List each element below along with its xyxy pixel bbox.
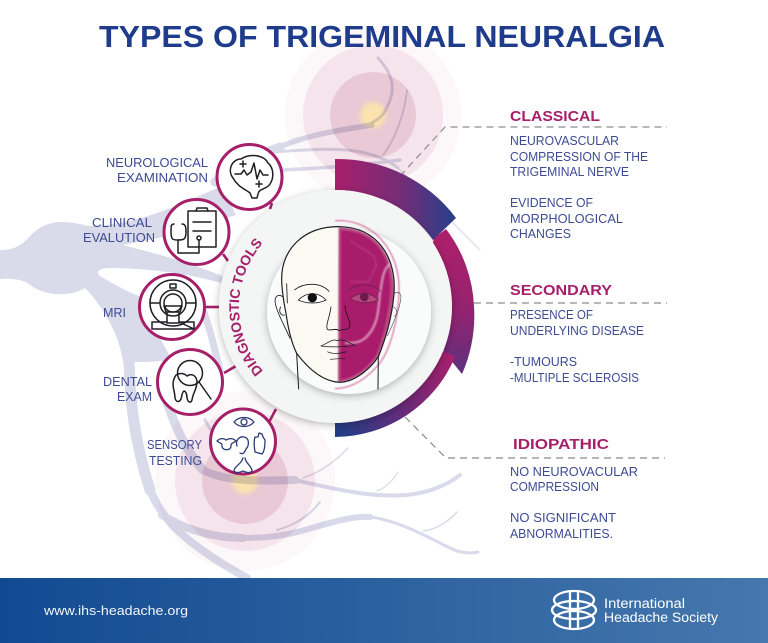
outer white disc <box>219 190 452 423</box>
text block: UNDERLYING DISEASE <box>510 324 644 338</box>
inner white disc <box>267 230 431 394</box>
face: pink halo <box>335 221 399 389</box>
face: neck <box>297 353 378 389</box>
face: magenta pain half <box>341 231 390 379</box>
face: light trigeminal band <box>345 263 391 343</box>
face: inner lighter band <box>350 241 377 282</box>
icon: MRI scanner <box>150 280 196 329</box>
tool: dental exam <box>103 350 222 414</box>
dashed leader: secondary <box>474 302 667 304</box>
label: EXAM <box>117 390 152 404</box>
label: MRI <box>103 306 126 320</box>
icon ring: tooth <box>158 350 222 414</box>
face: right ear <box>387 292 401 336</box>
face: magenta rim <box>338 227 394 382</box>
website url: www.ihs-headache.org <box>43 603 188 618</box>
face: left ear <box>275 283 290 338</box>
arc: classical segment <box>335 159 456 240</box>
glow: upper pain point <box>285 27 461 203</box>
text block: -MULTIPLE SCLEROSIS <box>510 371 639 385</box>
icon: brain with pulse <box>230 156 273 198</box>
arc: secondary segment <box>420 229 474 374</box>
heading: SECONDARY <box>510 282 612 299</box>
heading: IDIOPATHIC <box>513 436 609 453</box>
footer band <box>0 578 768 643</box>
label: DENTAL <box>103 375 152 389</box>
connector stubs <box>206 203 276 424</box>
tool: sensory testing <box>147 409 276 474</box>
tool: neurological examination <box>106 144 282 210</box>
logo name: International <box>604 596 685 611</box>
text block: COMPRESSION OF THE <box>510 150 648 164</box>
icon: clipboard and stethoscope <box>171 208 216 253</box>
tool: MRI <box>103 274 204 340</box>
text block: COMPRESSION <box>510 480 599 494</box>
icon ring: scanner <box>140 274 204 340</box>
face illustration <box>275 221 401 389</box>
tool: clinical evalution <box>83 200 229 264</box>
text block: MORPHOLOGICAL <box>510 212 623 226</box>
text block: NO SIGNIFICANT <box>510 511 616 525</box>
dashed leader: classical <box>400 127 667 176</box>
label: EXAMINATION <box>117 171 208 185</box>
text block: NEUROVASCULAR <box>510 134 619 148</box>
face: head outline <box>282 227 394 382</box>
dashed leader: idiopathic <box>405 417 665 458</box>
label: CLINICAL <box>92 216 152 230</box>
label: NEUROLOGICAL <box>106 156 208 170</box>
text block: TRIGEMINAL NERVE <box>510 165 629 179</box>
icon ring: senses <box>210 409 276 474</box>
curved label: diagnostic tools: DIAGNOSTIC TOOLS <box>229 238 263 377</box>
icon: tooth and magnifier <box>173 360 211 402</box>
logo name: Headache Society <box>604 610 718 625</box>
icon: eye, tongue, ear, hand, nose <box>217 418 265 473</box>
text block: -TUMOURS <box>510 355 577 369</box>
title: TYPES OF TRIGEMINAL NEURALGIA <box>99 19 665 54</box>
glow: lower pain point <box>155 391 335 571</box>
trigeminal nerve illustration <box>0 58 480 578</box>
panel: secondary <box>510 282 644 385</box>
logo mark <box>552 591 596 629</box>
text block: CHANGES <box>510 227 571 241</box>
face: left eye <box>294 284 329 303</box>
label: SENSORY <box>147 438 203 452</box>
text block: PRESENCE OF <box>510 308 593 322</box>
panel: classical <box>510 108 648 241</box>
text block: EVIDENCE OF <box>510 196 593 210</box>
icon ring: clipboard <box>164 200 229 264</box>
text block: NO NEUROVACULAR <box>510 465 638 479</box>
face: left half skin <box>282 227 340 382</box>
face: mouth <box>321 340 355 359</box>
label: EVALUTION <box>83 231 155 245</box>
face: right eye <box>349 285 381 303</box>
panel: idiopathic <box>510 436 638 541</box>
icon ring: brain <box>217 144 282 210</box>
heading: CLASSICAL <box>510 108 600 125</box>
label: TESTING <box>149 454 202 468</box>
arc: idiopathic segment <box>335 350 455 437</box>
face: nose <box>327 305 350 331</box>
text block: ABNORMALITIES. <box>510 527 613 541</box>
